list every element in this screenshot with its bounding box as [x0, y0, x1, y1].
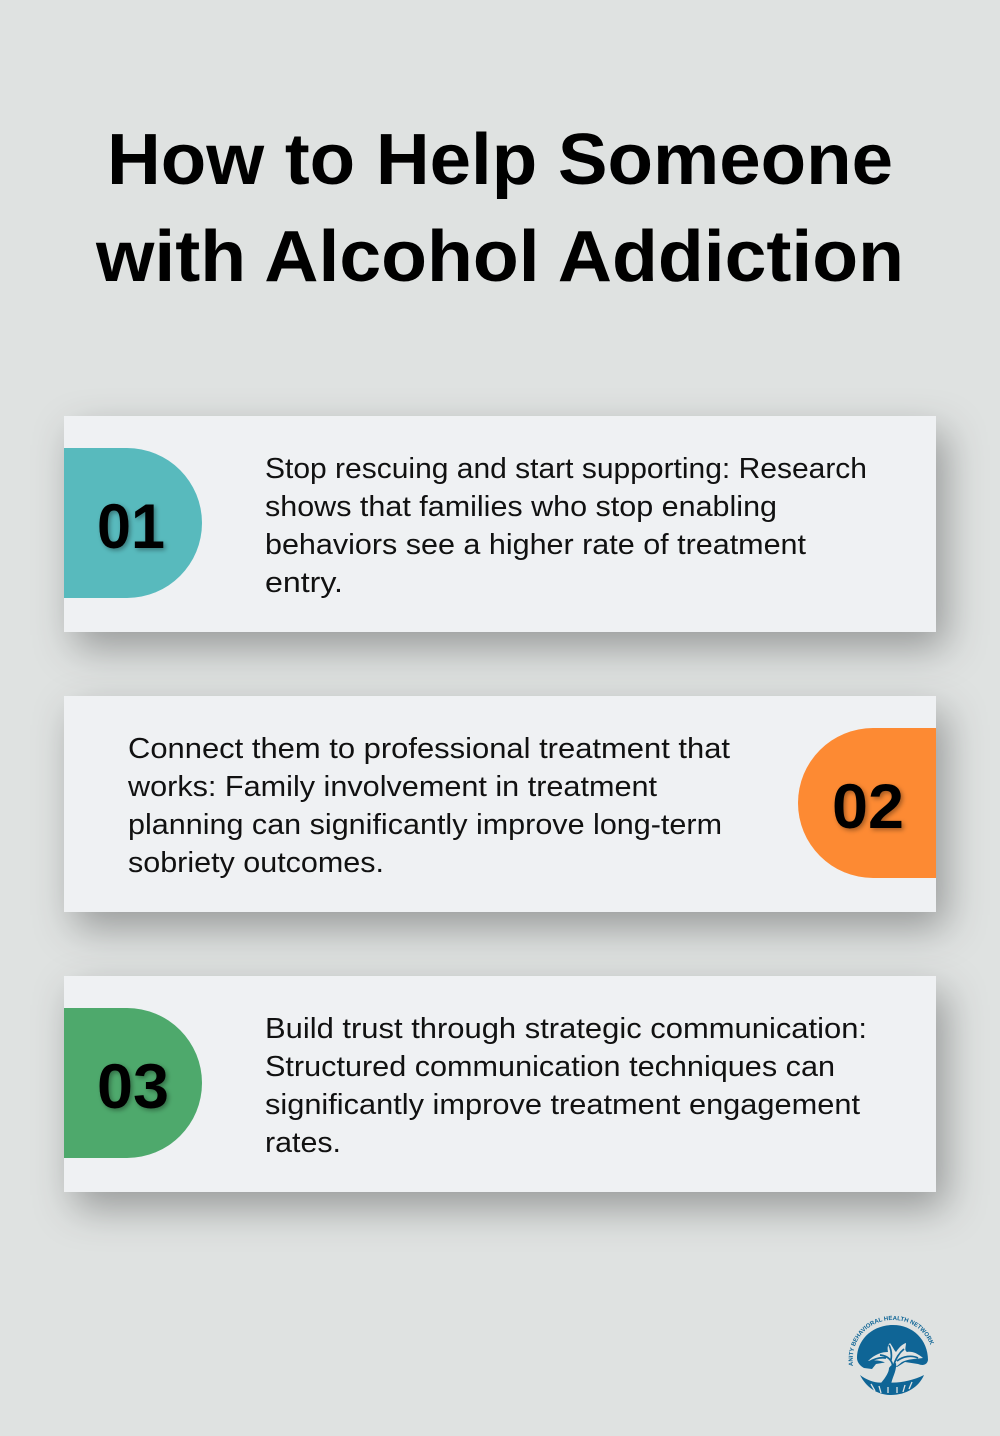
- panel: step 3: [64, 976, 936, 1192]
- text block 1: shows that families who stop enabling: [265, 491, 777, 523]
- number badge 01: [64, 448, 202, 598]
- panel: step 1: [64, 416, 936, 632]
- number badge 03: [64, 1008, 202, 1158]
- tree branches: [869, 1345, 918, 1369]
- tree canopy: [857, 1325, 928, 1369]
- number badge 01: 01: [97, 492, 165, 562]
- text block 1: behaviors see a higher rate of treatment: [265, 529, 806, 561]
- text block 2: [127, 733, 730, 879]
- number badge 03: 03: [97, 1052, 169, 1122]
- canopy gaps showing background: [868, 1343, 923, 1366]
- text block 1: Stop rescuing and start supporting: Research: [265, 453, 867, 485]
- text block 2: planning can significantly improve long-term: [128, 809, 722, 841]
- panel: step 2: [64, 696, 936, 912]
- card background 3: [64, 976, 936, 1192]
- text block 3: significantly improve treatment engagement: [265, 1089, 860, 1121]
- title: [95, 120, 904, 297]
- logo ring text: [853, 1320, 934, 1372]
- card background 2: [64, 696, 936, 912]
- card background 1: [64, 416, 936, 632]
- text block 3: Structured communication techniques can: [265, 1051, 835, 1083]
- text block 3: [265, 1013, 867, 1159]
- text block 2: works: Family involvement in treatment: [127, 771, 657, 803]
- tree trunk: [881, 1363, 896, 1385]
- root gaps: [871, 1382, 912, 1393]
- text block 3: rates.: [265, 1127, 341, 1159]
- roots bowl: [860, 1375, 924, 1395]
- number badge 02: 02: [832, 772, 904, 842]
- icon: Amity Behavioral Health Network logo: ANITY BEHAVIORAL HEALTH NETWORK: [848, 1316, 934, 1366]
- text block 2: sobriety outcomes.: [128, 847, 384, 879]
- number badge 02: [798, 728, 936, 878]
- text block 2: Connect them to professional treatment that: [128, 733, 730, 765]
- title: with Alcohol Addiction: [95, 217, 904, 297]
- text block 3: Build trust through strategic communication:: [265, 1013, 867, 1045]
- text block 1: [265, 453, 867, 599]
- text block 1: entry.: [265, 567, 343, 599]
- icon: Amity Behavioral Health Network logo: [848, 1316, 934, 1395]
- title: How to Help Someone: [107, 120, 893, 200]
